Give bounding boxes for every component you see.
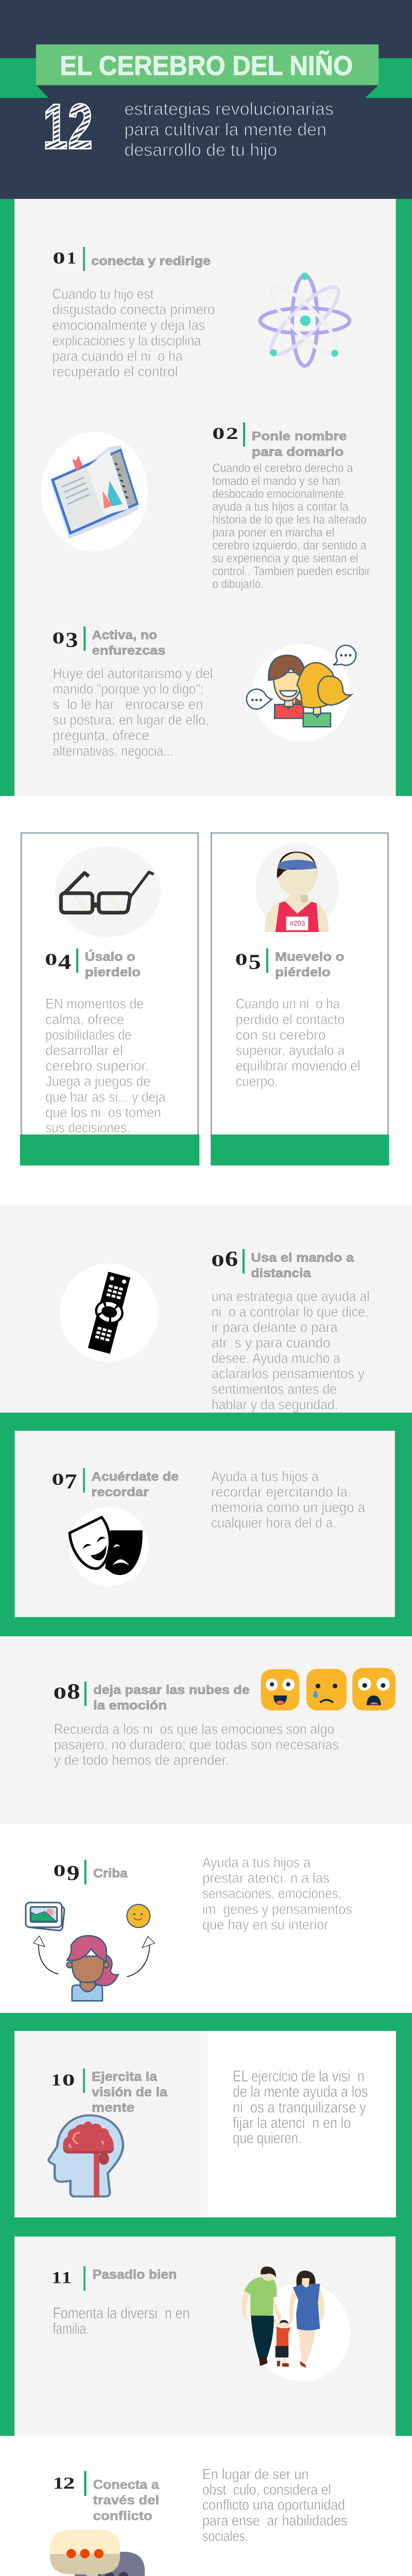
- heading 08: 0: [54, 1684, 66, 1703]
- strategy 02: cerebro izquierdo, dar sentido a: [212, 538, 367, 552]
- text 09: im genes y pensamientos: [202, 1901, 352, 1917]
- strategy 11 text: Fomenta la diversi n en: [53, 2304, 190, 2322]
- text 05: Cuando un ni o ha: [236, 996, 340, 1012]
- strategy 01: disgustado conecta primero: [53, 301, 215, 317]
- text 04: cerebro superior.: [45, 1058, 149, 1074]
- strategy 02: para domarlo: [252, 445, 344, 459]
- text 08: [54, 1721, 339, 1768]
- strategy 01: [53, 247, 215, 380]
- text 12: conflicto una oportunidad: [202, 2497, 345, 2514]
- big number 12: 12: [43, 91, 93, 162]
- text 09: que hay en su interior: [202, 1917, 329, 1933]
- heading 10: 0: [62, 2070, 75, 2089]
- strategy 01: Cuando tu hijo est: [53, 286, 154, 302]
- strategy 02: su experiencia y que sientan el: [212, 551, 358, 565]
- text 07: recordar ejercitando la: [211, 1484, 348, 1500]
- strategy 02: o dibujarlo.: [212, 577, 264, 591]
- icon: speech bubbles: [50, 2530, 145, 2576]
- heading 07: Acuérdate de: [92, 1470, 179, 1484]
- text 04: desarrollar el: [45, 1042, 123, 1058]
- strategy 02: historia de lo que les ha alterado: [212, 513, 367, 527]
- strategy 06 text: aclararlos pensamientos y: [212, 1366, 365, 1382]
- subtitle: [124, 99, 334, 160]
- strategy 02: control.. Tambien pueden escribir: [212, 564, 370, 578]
- text 10: fijar la atenci n en lo: [233, 2114, 351, 2132]
- strategy 02: 2: [226, 425, 238, 443]
- heading 04: pierdelo: [85, 965, 141, 979]
- strategy 02: ayuda a tus hijos a contar la: [212, 500, 349, 514]
- text 04: sus decisiones.: [45, 1120, 130, 1136]
- strategy 06 text: ir para delante o para: [212, 1319, 338, 1335]
- subtitle: estrategias revolucionarias: [124, 99, 334, 119]
- strategy 06 text: Usa el mando a: [251, 1251, 354, 1265]
- icon: theatre masks: [69, 1507, 148, 1586]
- text 08: pasajero, no duradero; que todas son necesarias: [54, 1736, 339, 1752]
- strategy 06 text: sentimientos antes de: [212, 1381, 337, 1397]
- strategy 11 text: [52, 2266, 190, 2337]
- strategy 01: para cuando el ni o ha: [53, 348, 183, 364]
- strategy 06 text: hablar y da seguridad.: [212, 1397, 338, 1413]
- text 05: con su cerebro: [236, 1027, 326, 1043]
- text 09: [202, 1854, 352, 1933]
- strategy 03: su postura; en lugar de ello,: [53, 712, 209, 728]
- text 09: prestar atenci n a las: [202, 1870, 330, 1886]
- text 12: obst culo, considera el: [202, 2482, 331, 2498]
- heading 04: Úsalo o: [85, 950, 135, 964]
- strategy 03: manido "porque yo lo digo";: [53, 681, 203, 697]
- icon: emoji faces: [261, 1668, 396, 1710]
- text 05: perdido el contacto: [236, 1011, 345, 1027]
- heading 04: [45, 948, 141, 979]
- text 05: [236, 996, 360, 1089]
- text 05: cuerpo.: [236, 1073, 278, 1089]
- title ribbon: [36, 44, 379, 85]
- text 12: sociales.: [202, 2528, 248, 2545]
- heading 05: Muevelo o: [275, 950, 344, 964]
- icon: remote control: [60, 1264, 158, 1362]
- heading 12: través del: [93, 2494, 159, 2507]
- heading 12: 2: [63, 2474, 75, 2493]
- heading 12: [53, 2471, 160, 2523]
- panel: strategies 01 to 03: [0, 199, 412, 796]
- heading 10: mente: [92, 2100, 134, 2115]
- panel: strategy 12: [50, 2466, 347, 2576]
- heading 08: 8: [67, 1680, 80, 1704]
- panel: strategy 09: [26, 1854, 352, 2001]
- heading 05: [235, 948, 344, 979]
- icon: runner: [255, 843, 339, 932]
- panel: strategies 10 and 11: [0, 2013, 412, 2436]
- strategy 03: enfurezcas: [92, 643, 165, 657]
- strategy 01: emocionalmente y deja las: [53, 317, 205, 333]
- panel: strategy 05: [211, 833, 389, 1165]
- panel: strategy 07: [0, 1413, 412, 1636]
- text 10: que quieren.: [233, 2129, 302, 2147]
- icon: runner: #203: [290, 919, 305, 927]
- text 04: calma, ofrece: [45, 1011, 124, 1027]
- icon: glasses: [55, 846, 161, 937]
- text 12: En lugar de ser un: [202, 2466, 308, 2483]
- strategy 06 text: distancia: [251, 1266, 311, 1280]
- strategy 06 text: ni o a controlar lo que dice,: [212, 1304, 369, 1320]
- heading 07: 7: [65, 1469, 77, 1493]
- panel: strategy 04: [20, 833, 199, 1165]
- strategy 11 text: 1: [62, 2268, 72, 2287]
- heading 10: [51, 2069, 167, 2115]
- icon: family: [242, 2266, 350, 2382]
- strategy 01: recuperado el control: [53, 364, 178, 380]
- heading 09: Criba: [93, 1867, 128, 1880]
- text 05: superior, ayudalo a: [236, 1042, 345, 1058]
- strategy 03: Activa, no: [92, 628, 157, 642]
- panel: strategy 08: [0, 1636, 412, 1824]
- title ribbon: EL CEREBRO DEL NIÑO: [60, 50, 353, 81]
- header band: [0, 0, 412, 199]
- heading 10: visión de la: [92, 2085, 167, 2099]
- text 04: que los ni os tomen: [45, 1104, 161, 1120]
- strategy 03: 0: [53, 629, 65, 648]
- icon: head with brain: [48, 2115, 123, 2197]
- strategy 01: explicaciones y la disciplina: [53, 332, 201, 348]
- heading 08: la emoción: [93, 1699, 167, 1713]
- strategy 11 text: Pasadlo bien: [93, 2267, 177, 2282]
- icon: smiley: [127, 1904, 150, 1927]
- text 04: Juega a juegos de: [45, 1073, 150, 1089]
- icon: atom: [260, 273, 350, 366]
- heading 10: Ejercita la: [92, 2069, 157, 2083]
- strategy 03: s lo le har enrocarse en: [53, 697, 203, 713]
- strategy 02: desbocado emocionalmente,: [212, 487, 347, 501]
- icon: book: [41, 432, 148, 551]
- strategy 06 text: 0: [211, 1252, 225, 1270]
- arrow: left: [33, 1936, 58, 1974]
- heading 09: [54, 1860, 128, 1885]
- strategy 03: [53, 626, 213, 759]
- text 09: Ayuda a tus hijos a: [202, 1854, 311, 1870]
- icon: photo cards: [26, 1903, 65, 1931]
- strategy 11 text: familia.: [53, 2320, 89, 2337]
- heading 09: 9: [67, 1861, 80, 1885]
- text 07: [211, 1468, 366, 1531]
- strategy 06 text: 6: [225, 1247, 238, 1272]
- text 04: posibilidades de: [45, 1027, 131, 1043]
- heading 05: 0: [235, 951, 248, 969]
- text 07: memoria como un juego a: [211, 1499, 366, 1515]
- heading 05: 5: [249, 950, 261, 974]
- strategy 02: para poner en marcha el: [212, 526, 334, 539]
- strategy 11 text: 1: [52, 2268, 61, 2287]
- arrow: right: [127, 1937, 155, 1977]
- subtitle: desarrollo de tu hijo: [124, 141, 277, 160]
- heading 07: [52, 1468, 179, 1499]
- text 08: y de todo hemos de aprender.: [54, 1752, 229, 1768]
- strategy 01: 1: [67, 249, 76, 268]
- heading 12: conflicto: [93, 2509, 152, 2523]
- strategy 02: Cuando el cerebro derecho a: [212, 461, 353, 475]
- strategy 06 text: atr s y para cuando: [212, 1334, 330, 1350]
- heading 08: deja pasar las nubes de: [93, 1683, 250, 1697]
- icon: two people talking: [247, 644, 356, 742]
- text 04: EN momentos de: [45, 996, 144, 1012]
- heading 09: 0: [54, 1861, 66, 1880]
- heading 10: 1: [51, 2070, 61, 2089]
- strategy 06 text: [211, 1247, 370, 1413]
- strategy 03: 3: [66, 628, 78, 652]
- text 07: cualquier hora del d a.: [211, 1515, 336, 1531]
- text 08: Recuerda a los ni os que las emociones son algo: [54, 1721, 334, 1737]
- text 07: Ayuda a tus hijos a: [211, 1468, 319, 1484]
- strategy 03: Huye del autoritarismo y del: [53, 665, 213, 681]
- text 10: [233, 2067, 368, 2147]
- heading 12: 1: [53, 2474, 63, 2493]
- text 05: equilibrar moviendo el: [236, 1058, 360, 1074]
- text 12: [202, 2466, 347, 2545]
- strategy 06 text: una estrategia que ayuda al: [212, 1289, 370, 1304]
- text 04: que har as si... y deja: [45, 1089, 166, 1105]
- icon: girl: [67, 1936, 118, 2001]
- strategy 02: Ponle nombre: [252, 430, 347, 444]
- heading 04: 4: [58, 950, 71, 974]
- strategy 06 text: desee. Ayuda mucho a: [212, 1350, 340, 1366]
- text 09: sensaciones, emociones,: [202, 1886, 341, 1902]
- heading 12: Conecta a: [93, 2478, 160, 2492]
- strategy 03: pregunta, ofrece: [53, 727, 149, 743]
- strategy 02: [212, 422, 370, 591]
- heading 05: piérdelo: [275, 965, 331, 979]
- panel: strategy 06: [0, 1206, 412, 1413]
- strategy 02: tomado el mando y se han: [212, 474, 340, 488]
- heading 04: 0: [45, 951, 57, 969]
- strategy 01: conecta y redirige: [91, 254, 211, 268]
- strategy 03: alternativas, negocia...: [53, 743, 174, 759]
- strategy 02: 0: [212, 425, 225, 443]
- text 04: [45, 996, 166, 1136]
- heading 08: [54, 1680, 250, 1713]
- heading 07: 0: [52, 1470, 64, 1489]
- heading 07: recordar: [92, 1485, 149, 1499]
- subtitle: para cultivar la mente den: [124, 120, 327, 140]
- text 12: para ense ar habilidades: [202, 2513, 347, 2529]
- strategy 01: 0: [53, 249, 65, 268]
